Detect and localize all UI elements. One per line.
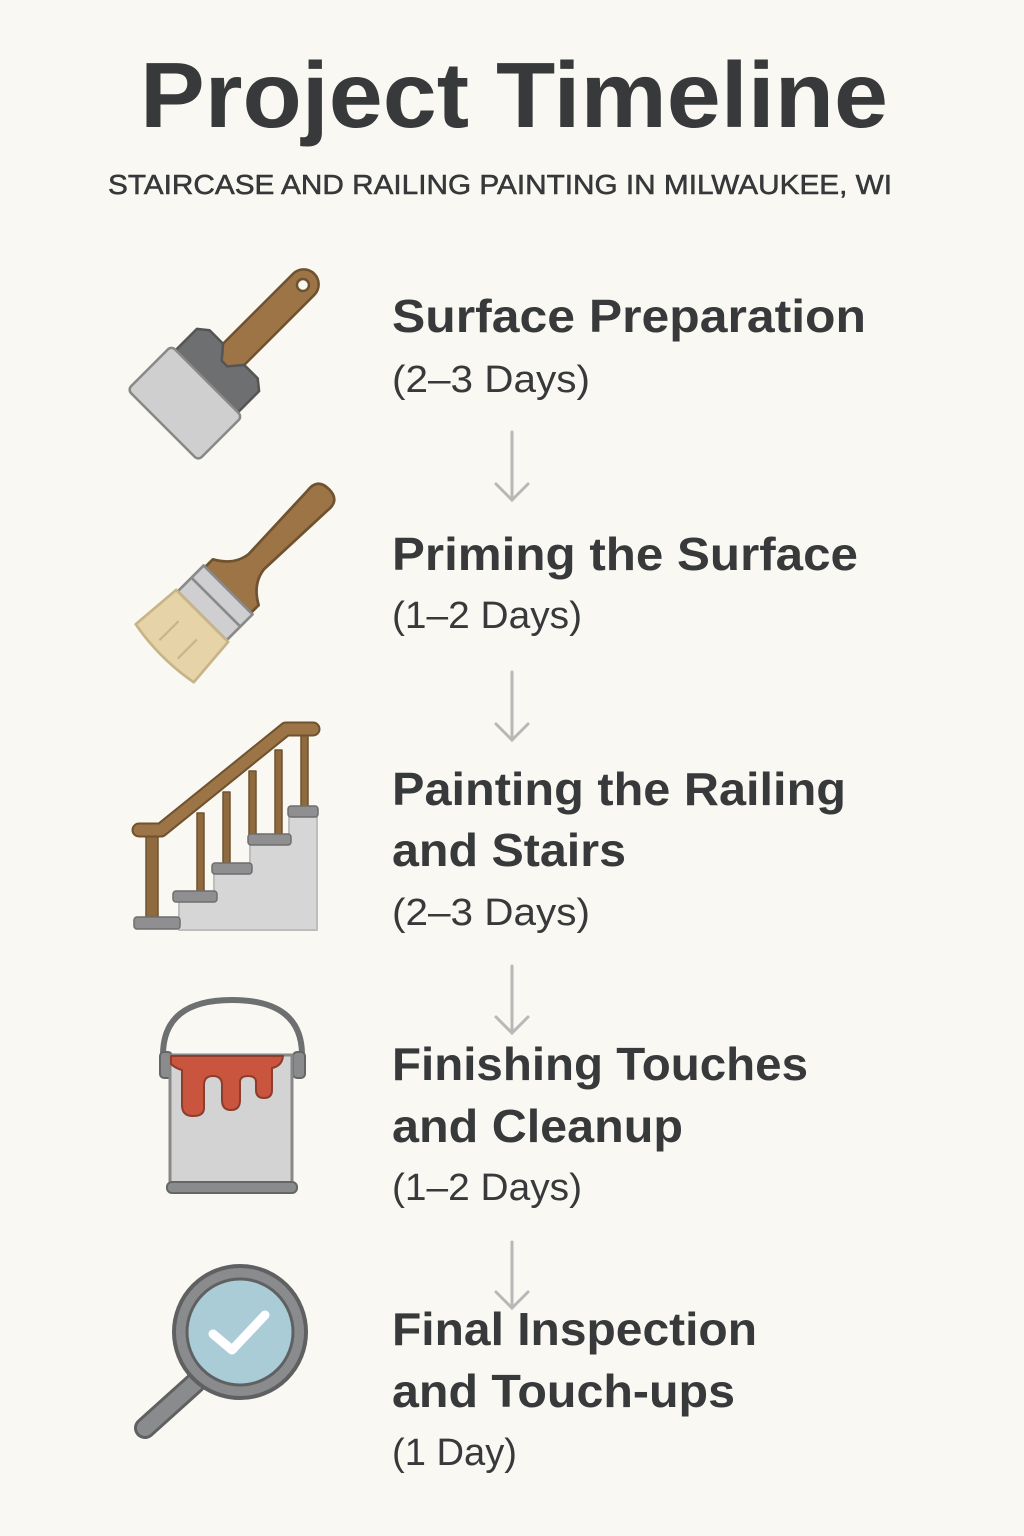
step 5 text: and Touch-ups (392, 1365, 735, 1417)
icon: paint can (160, 1000, 305, 1193)
step 5 text: Final Inspection (392, 1303, 757, 1355)
subtitle: STAIRCASE AND RAILING PAINTING IN MILWAUKEE, WI (108, 169, 892, 200)
step 3 text: Painting the Railing (392, 763, 846, 815)
step 5 text: (1 Day) (392, 1432, 517, 1474)
step 4 text (392, 1038, 808, 1209)
arrow 2 (496, 672, 528, 740)
arrow 3 (496, 966, 528, 1033)
icon: paint brush (133, 460, 358, 685)
step 4 text: Finishing Touches (392, 1038, 808, 1090)
step 4 text: and Cleanup (392, 1100, 683, 1152)
step 5 text (392, 1303, 757, 1474)
title: Project Timeline (140, 43, 888, 147)
step 2 text (392, 528, 858, 637)
step 3 text: and Stairs (392, 824, 626, 876)
icon: magnifier (145, 1266, 306, 1428)
step 2 text: (1–2 Days) (392, 595, 582, 637)
step 3 text (392, 763, 846, 934)
step 1 text: Surface Preparation (392, 290, 866, 342)
icon: staircase (134, 729, 318, 930)
step 1 text: (2–3 Days) (392, 359, 590, 401)
step 1 text (392, 290, 866, 401)
arrow 4 (496, 1242, 528, 1308)
step 3 text: (2–3 Days) (392, 892, 590, 934)
arrow 1 (496, 432, 528, 500)
icon: scraper (128, 238, 350, 460)
step 2 text: Priming the Surface (392, 528, 858, 580)
step 4 text: (1–2 Days) (392, 1167, 582, 1209)
